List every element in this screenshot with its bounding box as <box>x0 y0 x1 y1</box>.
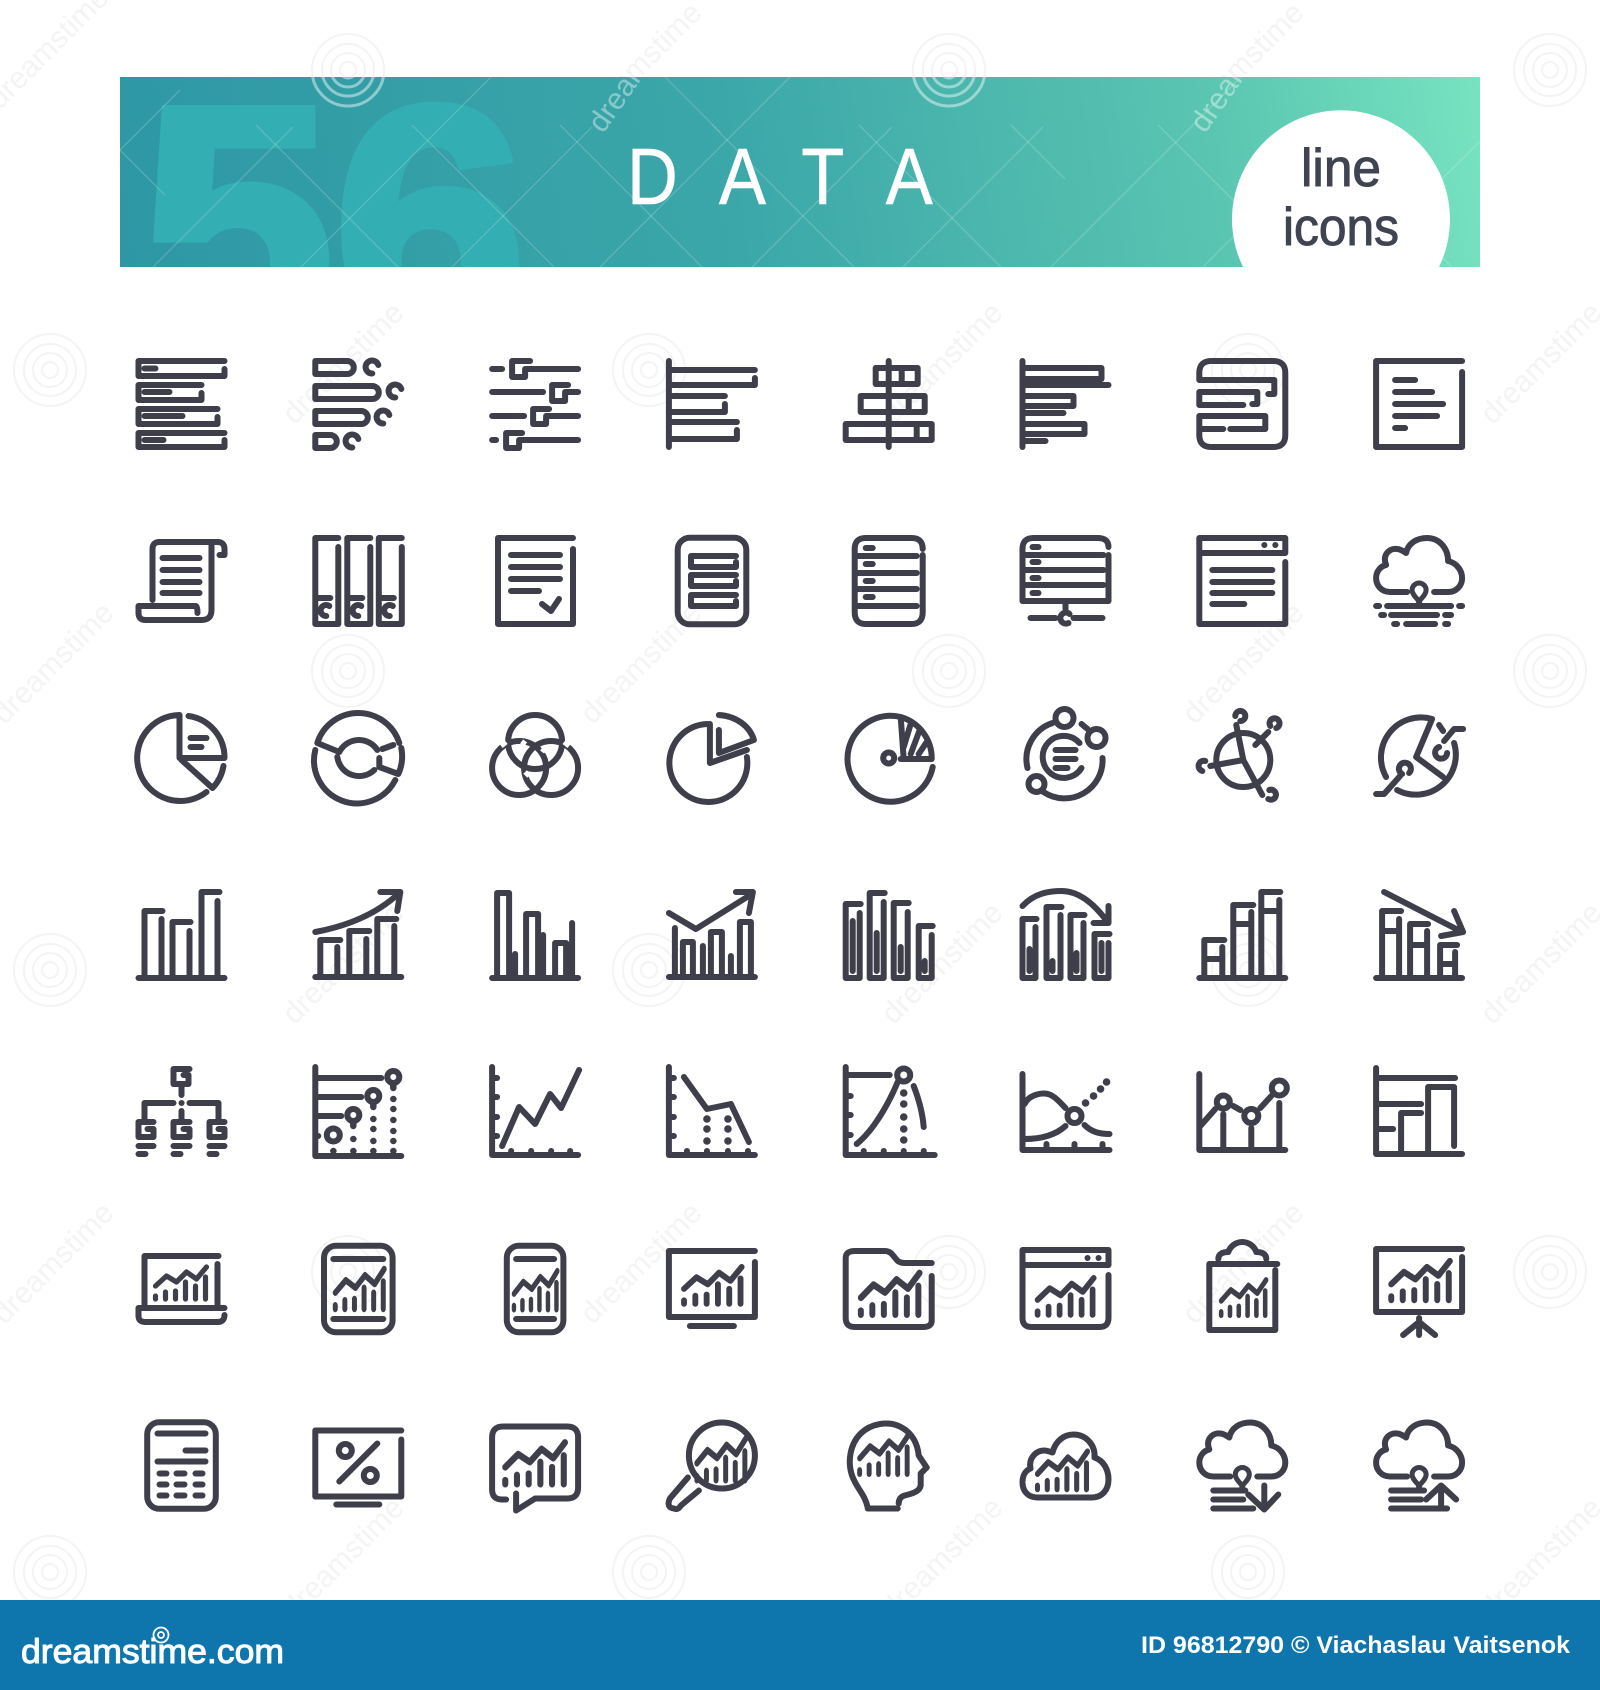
text: dreamstime <box>875 296 1009 430</box>
icon: rising bars with arrow <box>315 892 401 977</box>
icon: tablet chart <box>324 1246 393 1332</box>
icon: pie chart with separated wedge <box>669 715 754 802</box>
icon: tube bars with arc arrow <box>1022 891 1110 978</box>
icon grid <box>137 361 1463 1511</box>
credit text: ID 96812790 © Viachaslau Vaitsenok <box>1141 1632 1571 1659</box>
text: dreamstime <box>574 0 708 130</box>
icon: checked document <box>498 538 573 624</box>
icon: orbit data <box>1026 709 1106 798</box>
icon: presentation board chart <box>1376 1249 1462 1335</box>
icon: stacked progress bars <box>138 361 224 447</box>
text: dreamstime <box>276 296 410 430</box>
icon: bar chart <box>138 892 224 978</box>
icon: pin chart <box>315 1067 401 1156</box>
icon: rounded bars with hooks <box>315 361 401 448</box>
icon: monitor chart <box>669 1251 755 1326</box>
icon: declining bars with arrow <box>1376 892 1463 978</box>
icon: magnifier chart <box>669 1422 755 1509</box>
logo: dreamstime.com: dreamstime.com <box>21 1633 284 1671</box>
text: dreamstime <box>1176 0 1310 130</box>
icon: folder chart <box>846 1251 932 1327</box>
icon: clipboard chart <box>1209 1242 1277 1330</box>
text: dreamstime <box>1176 1196 1310 1330</box>
icon: text document <box>1376 361 1462 447</box>
icon: sliders <box>492 361 578 448</box>
icon: head chart <box>850 1423 927 1508</box>
icon: pie chart with notes <box>137 715 225 801</box>
text: dreamstime <box>1176 596 1310 730</box>
icon: crossing curves chart <box>1022 1074 1110 1150</box>
icon: cloud upload <box>1376 1422 1462 1508</box>
icon: bars with zigzag arrow <box>669 892 755 977</box>
text: dreamstime <box>875 1491 1009 1625</box>
icon: cloud chart <box>1022 1434 1108 1498</box>
icon: tablet table <box>855 538 923 624</box>
text: dreamstime <box>875 896 1009 1030</box>
icon: network screen <box>1022 538 1108 624</box>
icon: browser chart <box>1022 1250 1108 1327</box>
text: dreamstime <box>574 596 708 730</box>
big number 56: 56 <box>141 39 526 407</box>
icon: thin bar chart <box>492 893 578 978</box>
text: dreamstime <box>276 896 410 1030</box>
icon: donut chart <box>314 713 402 803</box>
icon: peak curve chart <box>846 1067 935 1155</box>
icon: speech bubble chart <box>492 1426 578 1510</box>
footer bar <box>0 1600 1600 1690</box>
icon: falling line chart <box>669 1067 755 1155</box>
icon: browser window text <box>1199 538 1285 624</box>
icon: binders <box>315 538 402 624</box>
icon: laptop chart <box>138 1256 224 1322</box>
title: DATA: DATA <box>627 132 933 221</box>
icon: horizontal bar chart left axis <box>669 361 755 447</box>
icon: pie nodes <box>1199 711 1280 800</box>
icon: rounded document with blocks <box>1199 361 1285 447</box>
header banner <box>120 77 1480 267</box>
icon: mixed bars <box>1376 1068 1462 1154</box>
badge: line icons: line <box>1301 139 1381 198</box>
icon: scroll <box>138 542 224 620</box>
icon: line with ring markers <box>1199 1074 1287 1150</box>
icon: phone chart <box>507 1246 563 1332</box>
icon: venn diagram <box>492 715 578 795</box>
icon: horizontal bars with lines <box>1022 361 1108 447</box>
icon: hierarchy <box>138 1069 224 1154</box>
icon: rounded document with stacked rows <box>678 538 746 624</box>
text: dreamstime <box>574 1196 708 1330</box>
icon: tube bars <box>846 893 933 978</box>
badge: line icons: icons <box>1283 198 1399 257</box>
icon: cloud network <box>1376 538 1462 624</box>
icon: rising line chart <box>492 1067 579 1155</box>
text: dreamstime <box>276 1491 410 1625</box>
badge: line icons <box>1232 110 1450 267</box>
icon: centered axis bars <box>846 361 932 447</box>
icon: pie circuit <box>1376 717 1463 795</box>
icon: pie chart with hatched wedge <box>847 716 933 802</box>
icon: percent monitor <box>315 1430 401 1504</box>
icon: stepped bars <box>1199 892 1285 978</box>
icon: calculator <box>147 1422 216 1509</box>
icon: cloud download <box>1199 1422 1285 1510</box>
